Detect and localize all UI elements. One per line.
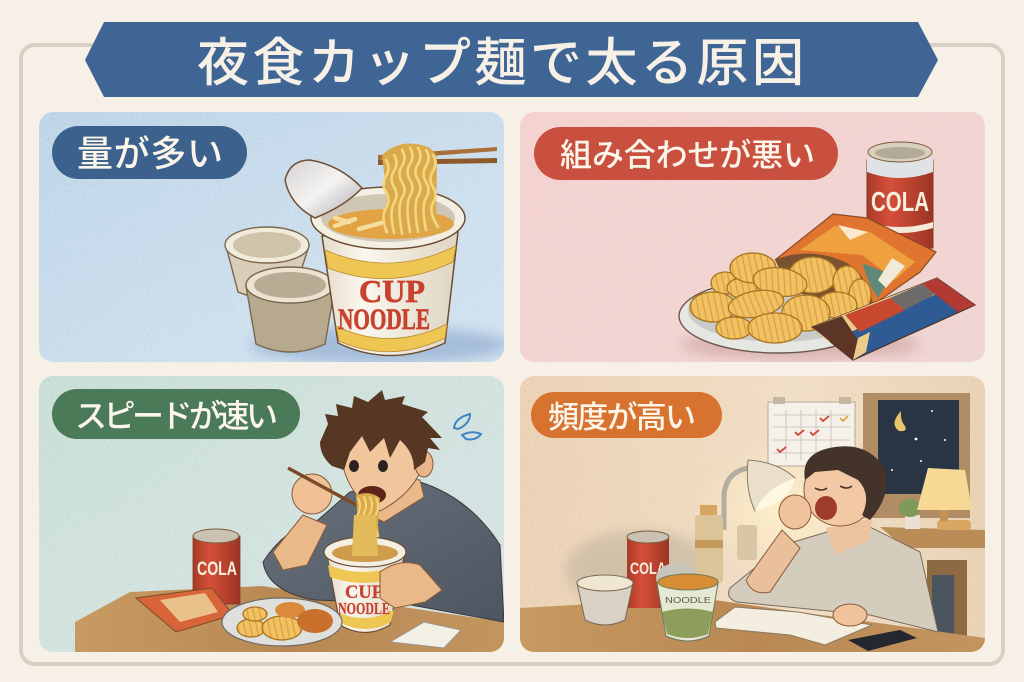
icon: cola can: COLA [630, 559, 666, 578]
icon: cup noodle in hand [324, 515, 442, 632]
panel: スピードが速い [39, 376, 504, 652]
icon: cola can [867, 142, 933, 248]
icon: phone [848, 630, 917, 651]
icon: empty cup front [246, 267, 335, 352]
panel: 量が多い [39, 112, 510, 363]
label: 頻度が高い [531, 392, 722, 438]
label: 量が多い: 量が多い [77, 133, 223, 174]
icon: cola can: COLA [197, 559, 237, 580]
icon: paper packet [390, 622, 461, 648]
icon: noodle lift [382, 143, 444, 234]
icon: cola can [627, 531, 669, 608]
icon: sweat drops [454, 414, 481, 439]
wall shadow [563, 527, 695, 597]
icon: empty cup back [225, 227, 309, 298]
label: 量が多い [52, 126, 247, 179]
icon: plate [678, 288, 836, 354]
icon: cup noodle: CUP [359, 273, 425, 309]
label: 組み合わせが悪い [534, 127, 838, 180]
icon: cola can [193, 529, 240, 604]
shadow under cups [250, 327, 510, 363]
label: スピードが速い [52, 389, 300, 439]
icon: calendar [768, 397, 855, 466]
icon: green snack cup [656, 563, 718, 641]
character: man yawning at desk [729, 446, 938, 632]
label: 組み合わせが悪い: 組み合わせが悪い [560, 137, 815, 173]
icon: desk with lamp and plant [880, 468, 985, 640]
icon: cup noodle in hand: NOODLE [338, 599, 390, 618]
icon: open book [715, 604, 872, 645]
icon: chopsticks [378, 147, 497, 165]
icon: desk lamp [724, 460, 795, 530]
title banner: 夜食カップ麺で太る原因 [197, 35, 804, 93]
icon: potato chips [690, 253, 871, 343]
icon: chip bag [136, 588, 233, 632]
label: スピードが速い: スピードが速い [75, 398, 278, 434]
icon: cup noodle: NOODLE [338, 303, 430, 336]
icon: chip bag [775, 214, 936, 310]
icon: used cup [577, 575, 633, 625]
icon: cup noodle [311, 187, 465, 356]
icon: snack bar [812, 278, 975, 360]
icon: cup noodle in hand: CUP [345, 582, 383, 603]
icon: plate with food [222, 598, 342, 646]
table [520, 598, 985, 652]
icon: bottle [695, 505, 757, 583]
title banner [85, 22, 938, 97]
panel: 組み合わせが悪い [520, 112, 985, 362]
hair [320, 390, 442, 470]
character: man eating fast [263, 390, 504, 622]
label: 頻度が高い: 頻度が高い [548, 400, 696, 435]
icon: cola can: COLA [871, 186, 929, 217]
icon: night window [863, 393, 970, 518]
icon: lid [285, 160, 362, 218]
table [75, 586, 504, 652]
plate shadow [680, 331, 920, 359]
panel: 頻度が高い [520, 376, 985, 652]
icon: green snack cup: NOODLE [665, 596, 711, 605]
